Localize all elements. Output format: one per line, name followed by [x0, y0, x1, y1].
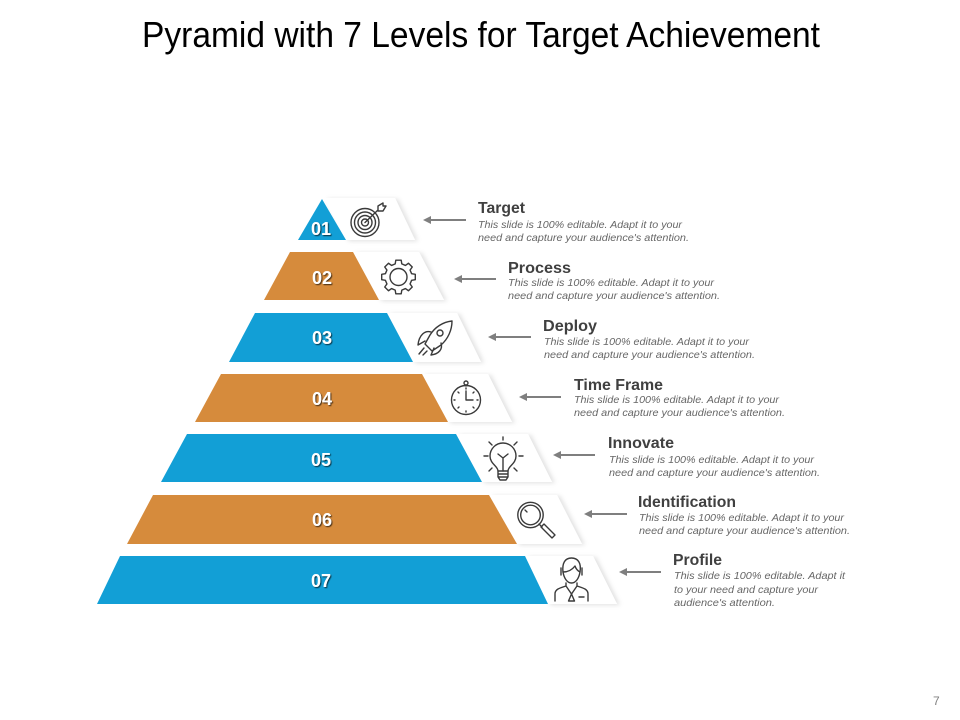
text: Profile	[673, 552, 846, 609]
text: Time Frame: Time Frame	[574, 377, 663, 394]
arrow 3	[488, 333, 531, 341]
level 01 blue segment	[298, 199, 346, 240]
arrow 1	[423, 216, 466, 224]
title: Pyramid with 7 Levels for Target Achievement	[142, 14, 820, 55]
text: Deploy: need and capture your audience's attention.	[544, 350, 755, 361]
text: Deploy: Deploy	[543, 318, 597, 335]
text: Innovate: This slide is 100% editable. Adapt it to your	[609, 455, 815, 466]
arrow 7	[619, 568, 661, 576]
arrow 4	[519, 393, 561, 401]
text: Deploy	[543, 318, 755, 361]
level 07 number: 07	[311, 571, 331, 591]
text: Deploy: This slide is 100% editable. Adapt it to your	[544, 337, 750, 348]
level 04 number: 04	[312, 389, 332, 409]
icon: light bulb	[484, 437, 523, 480]
text: Innovate: need and capture your audience's attention.	[609, 468, 820, 479]
level 02 orange segment	[264, 252, 379, 300]
icon: magnifier	[518, 502, 555, 538]
arrow 5	[553, 451, 595, 459]
level 02 white panel	[353, 252, 444, 300]
text: Target	[478, 200, 689, 244]
level 04	[195, 374, 512, 422]
icon: stopwatch	[452, 381, 480, 414]
level 04 white panel	[422, 374, 512, 422]
page number: 7	[933, 694, 940, 708]
text: Target: This slide is 100% editable. Adapt it to your	[478, 220, 683, 231]
text: Process: This slide is 100% editable. Adapt it to your	[508, 278, 715, 289]
text: Target: need and capture your audience's attention.	[478, 233, 689, 244]
level 01	[298, 198, 415, 240]
text: Profile: Profile	[673, 552, 722, 569]
text: Time Frame: need and capture your audience's attention.	[574, 408, 785, 419]
text: Time Frame: This slide is 100% editable. Adapt it to your	[574, 395, 780, 406]
level 01 number: 01	[311, 219, 331, 239]
text: Process: Process	[508, 260, 571, 277]
text: Target: Target	[478, 200, 526, 217]
text: Innovate	[608, 435, 820, 479]
level 07	[97, 556, 617, 604]
level 03 number: 03	[312, 328, 332, 348]
level 02	[264, 252, 444, 300]
level 01 white panel	[324, 198, 415, 240]
level 03 blue segment	[229, 313, 413, 362]
level 03 white panel	[387, 313, 481, 362]
icon: person	[555, 558, 588, 601]
level 05	[161, 434, 552, 482]
text: Process: need and capture your audience's attention.	[508, 291, 720, 302]
level 04 orange segment	[195, 374, 448, 422]
text: Innovate: Innovate	[608, 435, 674, 452]
icon: rocket	[418, 321, 452, 355]
level 06 number: 06	[312, 510, 332, 530]
text: Identification: This slide is 100% editable. Adapt it to your	[639, 513, 845, 524]
level 06 white panel	[489, 495, 582, 544]
level 03	[229, 313, 481, 362]
icon: gear	[382, 260, 415, 294]
text: Profile: to your need and capture your	[674, 585, 819, 596]
level 06 orange segment	[127, 495, 517, 544]
arrow 6	[584, 510, 627, 518]
text: Identification	[638, 494, 850, 537]
text: Identification: Identification	[638, 494, 736, 511]
level 05 blue segment	[161, 434, 482, 482]
level 07 blue segment	[97, 556, 548, 604]
level 07 white panel	[525, 556, 617, 604]
text: Time Frame	[574, 377, 785, 419]
arrow 2	[454, 275, 496, 283]
level 05 white panel	[456, 434, 552, 482]
icon: target	[351, 203, 386, 236]
text: Profile: audience's attention.	[674, 598, 775, 609]
level 06	[127, 495, 582, 544]
text: Profile: This slide is 100% editable. Adapt it	[674, 571, 846, 582]
level 02 number: 02	[312, 268, 332, 288]
level 05 number: 05	[311, 450, 331, 470]
text: Identification: need and capture your audience's attention.	[639, 526, 850, 537]
text: Process	[508, 260, 720, 302]
